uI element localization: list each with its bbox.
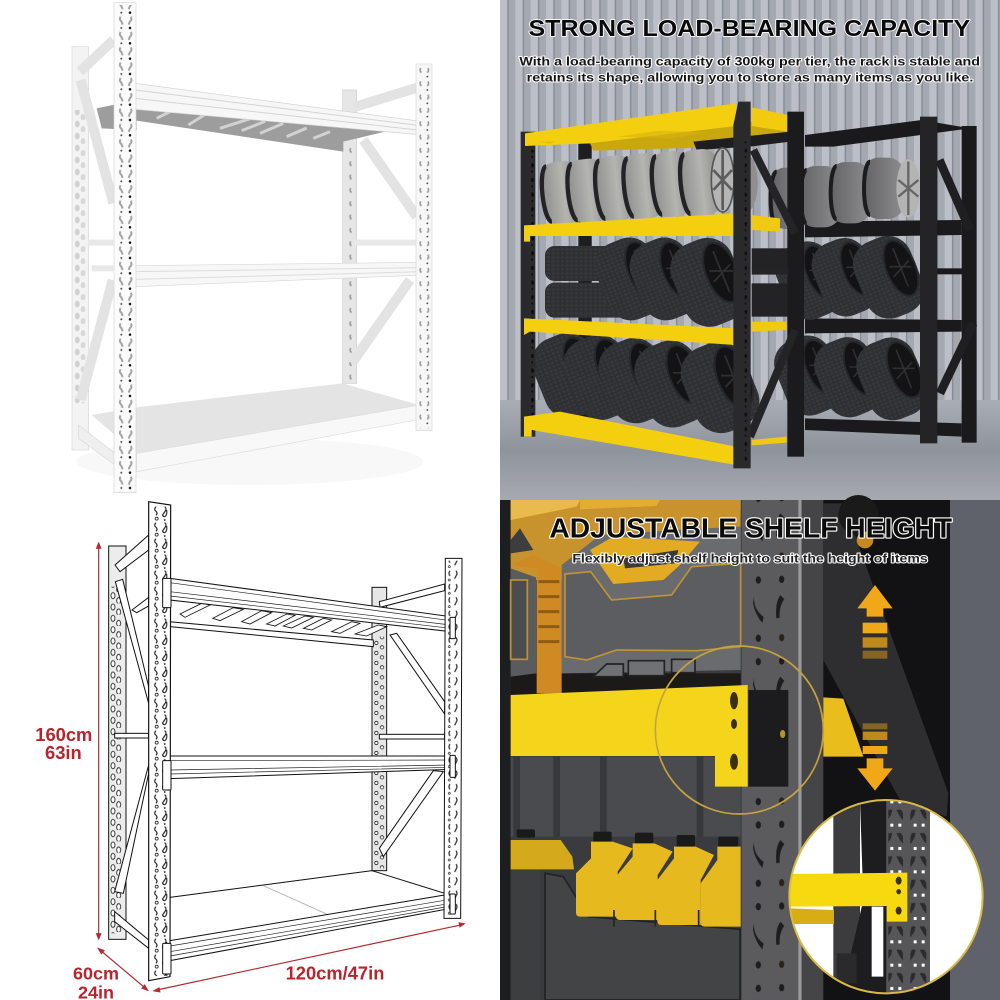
left upright holes	[522, 150, 534, 433]
front upright holes	[735, 140, 749, 463]
light right edge	[950, 500, 1000, 1000]
yellow shelf 2	[524, 213, 736, 242]
panel: line drawing with dimensions	[35, 502, 465, 1000]
black rack tires	[767, 228, 935, 428]
column second face	[802, 500, 823, 1000]
label: depth: 60cm	[73, 963, 119, 983]
jug shading	[614, 910, 699, 927]
bottom deck outline	[170, 871, 445, 914]
grey toolbox housing	[562, 527, 741, 673]
pin	[780, 730, 785, 738]
body line 1: With a load-bearing capacity of 300kg per tier, the rack is stable and	[519, 55, 980, 69]
yellow hexagon lid	[590, 537, 700, 584]
label: height: 160cm	[35, 724, 92, 745]
lower dark recess	[511, 673, 741, 697]
latch panels	[593, 659, 695, 677]
back left upright	[109, 546, 126, 939]
column side strip	[798, 500, 802, 1000]
right side braces	[379, 584, 445, 857]
back right upright	[372, 587, 387, 871]
black rack rims	[769, 158, 920, 229]
stacked flat tires	[545, 246, 628, 318]
yellow rack left upright	[521, 132, 535, 437]
body line 2: retains its shape, allowing you to store as many items as you like.	[527, 70, 973, 84]
inset artwork	[790, 797, 930, 1000]
middle tires	[587, 230, 788, 335]
black rack side braces	[939, 160, 973, 393]
corrugated wall	[500, 0, 1000, 403]
caps	[517, 829, 738, 847]
wheel hub	[857, 532, 873, 548]
panel: adjustable shelf height	[500, 495, 1000, 1000]
yellow rack back rail	[693, 132, 803, 150]
bottom deck	[92, 383, 419, 454]
panel: load-bearing capacity	[500, 0, 1000, 500]
lid slot	[623, 550, 678, 568]
holes back right	[349, 140, 356, 380]
shelf 1 deck	[537, 131, 707, 144]
bottom beam	[170, 894, 451, 961]
front left upright	[149, 502, 171, 981]
bin	[545, 873, 740, 1000]
floor	[500, 400, 1000, 500]
orange strip	[511, 555, 562, 693]
left edge strip	[500, 500, 511, 1000]
yellow rack front upright	[733, 102, 751, 468]
diagonal brace	[823, 503, 948, 817]
shelf slats	[157, 108, 330, 138]
bottom beam	[137, 405, 420, 472]
floor shadow	[77, 438, 423, 485]
title: ADJUSTABLE SHELF HEIGHT	[549, 512, 952, 543]
label: width: 120cm/47in	[286, 962, 384, 983]
beam back plate	[748, 690, 788, 787]
yellow beam	[511, 685, 748, 787]
bottom tires	[524, 325, 768, 441]
front left upright	[114, 3, 136, 493]
left bin	[511, 868, 541, 1000]
yellow shelf 3	[524, 318, 736, 345]
front right upright	[416, 64, 432, 431]
arrow down	[857, 723, 893, 791]
dark background	[500, 500, 1000, 1000]
orange strip ribs	[538, 582, 559, 642]
yellow rack rear left upright	[578, 143, 592, 437]
black rack rear parts	[805, 120, 977, 443]
rear yellow brace	[823, 697, 863, 757]
panel: white rack photo	[72, 3, 432, 493]
inset ring	[789, 800, 983, 993]
label: height inches: 63in	[45, 742, 82, 763]
yellow shelf 1	[525, 103, 736, 146]
left side braces	[115, 535, 149, 948]
arrow: width	[153, 922, 465, 992]
left box screen	[511, 580, 527, 659]
front right upright	[444, 558, 462, 918]
holes front right	[417, 67, 431, 428]
left box	[511, 568, 536, 677]
back left upright	[72, 47, 89, 450]
arrow: depth	[97, 948, 149, 991]
inset: detail	[789, 797, 983, 1000]
subtitle: Flexibly adjust shelf height to suit the height of items	[572, 552, 928, 566]
side beam bottom	[78, 425, 115, 465]
magnifier circle	[655, 646, 823, 814]
title: STRONG LOAD-BEARING CAPACITY	[528, 15, 970, 41]
jugs	[576, 842, 741, 927]
top shelf rear rail	[150, 620, 373, 647]
top beam	[135, 83, 423, 135]
beam connectors	[163, 578, 455, 974]
shelf slats	[180, 603, 387, 636]
yellow rack top deck	[590, 108, 787, 151]
dark rear	[823, 500, 950, 1000]
top shelf underside	[97, 100, 385, 152]
yellow rack rear right upright	[787, 112, 804, 457]
yellow rack rear shelves	[752, 215, 787, 445]
rims row	[538, 147, 758, 226]
left jug	[511, 840, 574, 869]
black rack front upright	[920, 117, 937, 443]
holes back left	[74, 110, 87, 403]
top beam	[170, 578, 451, 632]
column holes	[742, 500, 798, 1000]
column	[742, 500, 798, 1000]
beam holes	[730, 692, 738, 770]
back right upright	[343, 90, 357, 383]
side braces	[80, 40, 418, 400]
yellow rack side braces	[750, 150, 795, 437]
arrow: height	[96, 542, 101, 940]
yellow rack back top beam	[752, 107, 787, 132]
yellow shelf 4	[524, 412, 736, 465]
arrow up	[857, 585, 893, 659]
middle beam	[170, 756, 451, 779]
wheel at top	[838, 495, 878, 535]
wall ribs	[511, 757, 741, 837]
toolbox screen	[565, 563, 741, 660]
middle beam	[135, 262, 423, 287]
orange background top	[511, 500, 741, 580]
inset white background	[789, 800, 983, 993]
horizontal ties	[88, 243, 417, 268]
holes front left	[116, 5, 135, 492]
